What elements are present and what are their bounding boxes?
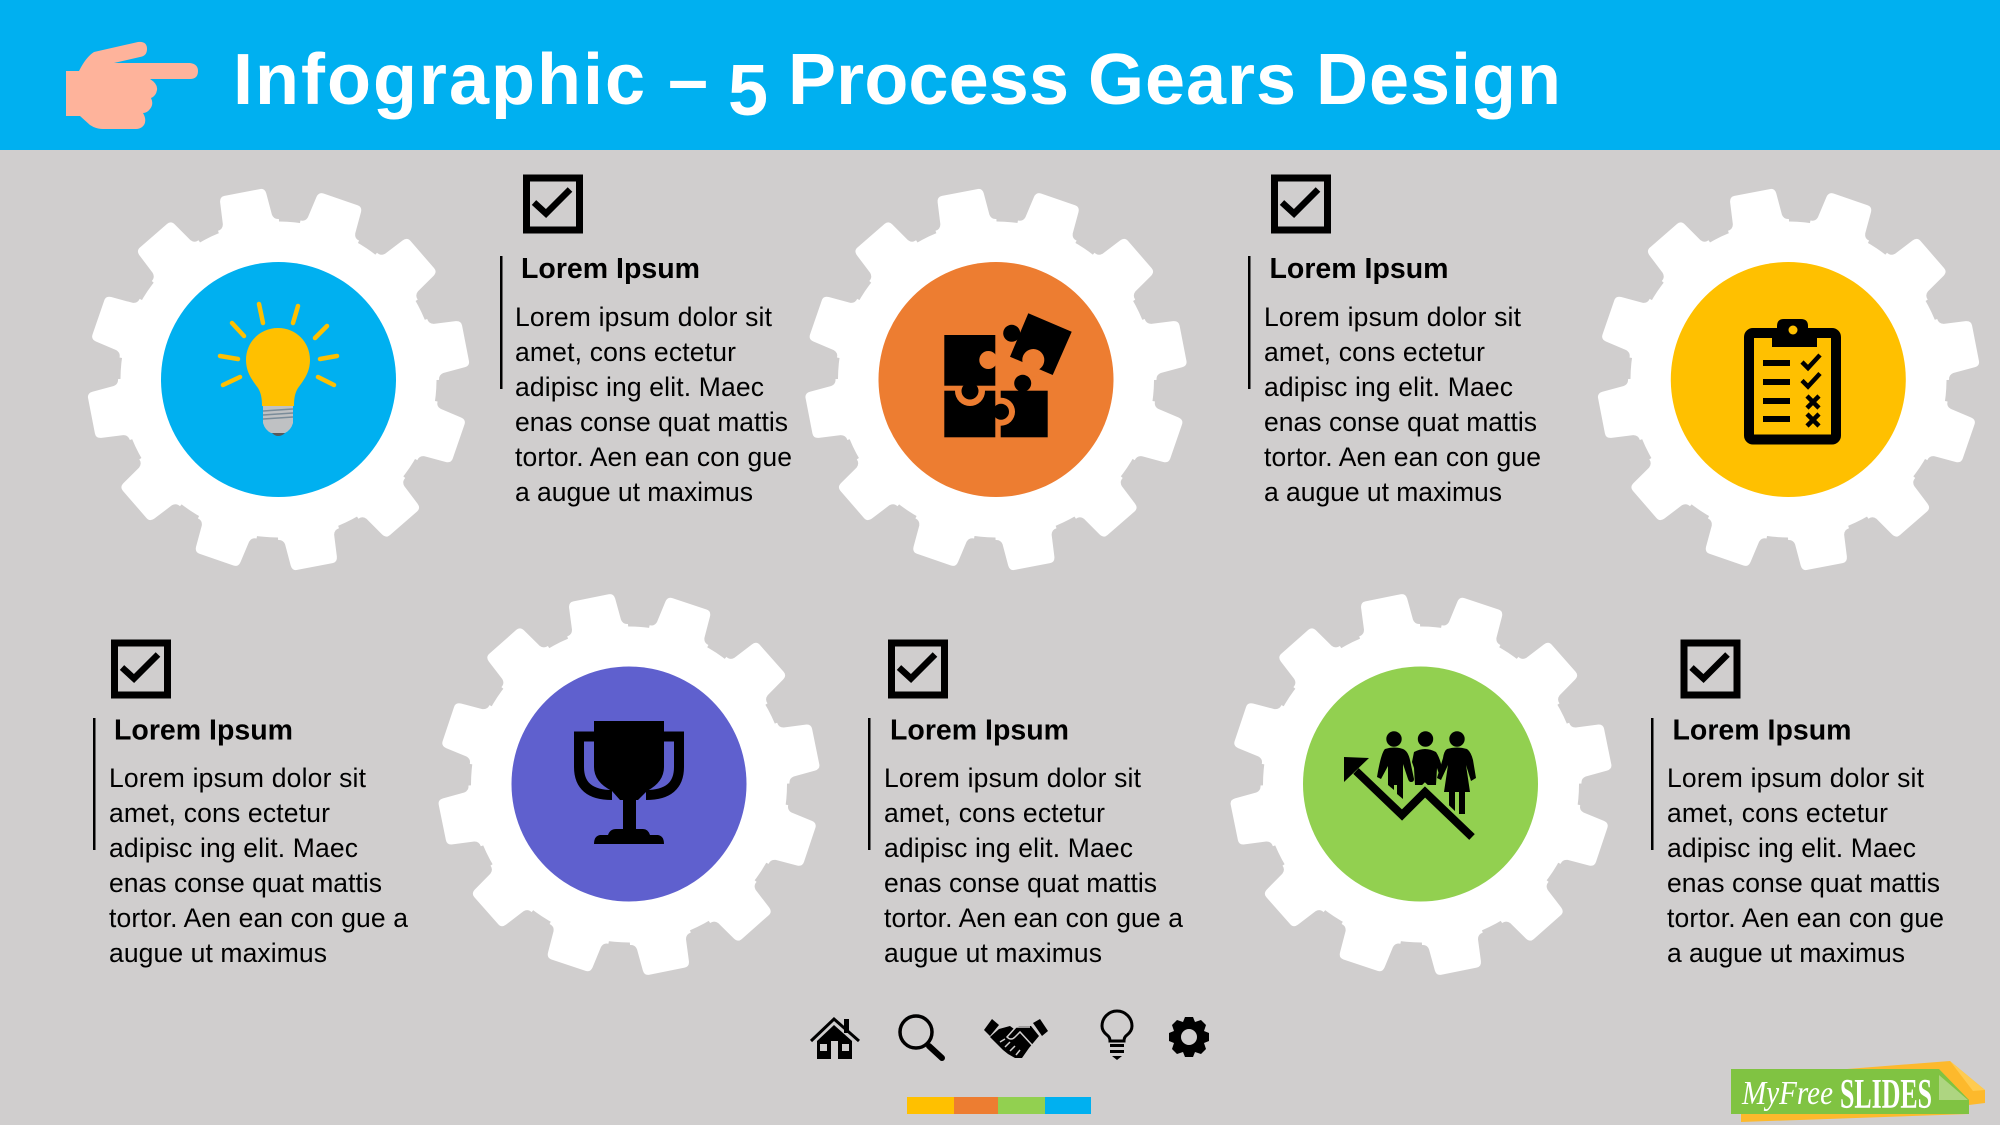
text block 2 [1248,178,1541,507]
gear 4: purple trophy [404,560,854,1009]
text block 4: Lorem ipsum dolor sit [884,763,1142,793]
icon: outline lightbulb [1102,1011,1132,1060]
gear 1: blue lightbulb [55,156,502,603]
icon: magnifier [900,1016,942,1058]
text block 1: amet, cons ectetur [515,337,736,367]
text block 5: adipisc ing elit. Maec [1667,833,1916,863]
text block 1: enas conse quat mattis [515,407,788,437]
text block 2: a augue ut maximus [1264,477,1502,507]
text block 1: tortor. Aen ean con gue [515,442,792,472]
text block 1: Lorem ipsum dolor sit [515,302,773,332]
logo: MyFree Slides [1731,1061,1985,1122]
text block 2: enas conse quat mattis [1264,407,1537,437]
text block 1: a augue ut maximus [515,477,753,507]
bottom icon row [811,1011,1209,1060]
text block 5: Lorem Ipsum [1672,714,1852,746]
text block 3: adipisc ing elit. Maec [109,833,358,863]
text block 1 [500,178,792,507]
text block 4: Lorem Ipsum [890,714,1069,746]
gear 5: green people chart [1196,560,1646,1009]
checkbox icon [1684,643,1737,695]
icon: puzzle pieces [944,313,1072,437]
logo: MyFree Slides: MyFree [1741,1075,1833,1112]
icon: clipboard checklist [1749,319,1836,440]
text block 4: adipisc ing elit. Maec [884,833,1133,863]
icon: handshake [984,1019,1048,1058]
text block 5 [1651,643,1944,968]
text block 4 [868,643,1183,968]
text block 4: augue ut maximus [884,938,1102,968]
text block 2: amet, cons ectetur [1264,337,1485,367]
text block 5: amet, cons ectetur [1667,798,1888,828]
text block 3: tortor. Aen ean con gue a [109,903,408,933]
text block 3: augue ut maximus [109,938,327,968]
text block 2: Lorem Ipsum [1270,253,1448,285]
text block 2: Lorem ipsum dolor sit [1264,302,1522,332]
icon: house [811,1019,859,1059]
text block 3: Lorem ipsum dolor sit [109,763,367,793]
icon: pointing hand [66,42,198,129]
title: Design [1316,40,1561,120]
text block 5: tortor. Aen ean con gue [1667,903,1944,933]
text block 5: Lorem ipsum dolor sit [1667,763,1925,793]
icon: settings gear [1169,1017,1209,1057]
icon: trophy [579,721,679,844]
colour bar [907,1097,1091,1114]
text block 5: a augue ut maximus [1667,938,1905,968]
title: – [668,40,708,120]
title: Infographic [233,40,645,120]
text block 3: amet, cons ectetur [109,798,330,828]
title: 5 [728,51,768,131]
logo: MyFree Slides: SLIDES [1840,1072,1932,1118]
text block 5: enas conse quat mattis [1667,868,1940,898]
text block 4: tortor. Aen ean con gue a [884,903,1183,933]
text block 3: enas conse quat mattis [109,868,382,898]
text block 1: adipisc ing elit. Maec [515,372,764,402]
checkbox icon [892,643,944,695]
checkbox icon [1274,178,1328,230]
text block 3 [93,643,408,968]
checkbox icon [114,643,168,695]
text block 4: amet, cons ectetur [884,798,1105,828]
text block 4: enas conse quat mattis [884,868,1157,898]
checkbox icon [526,178,580,230]
text block 2: tortor. Aen ean con gue [1264,442,1541,472]
gear 3: yellow clipboard [1565,156,2000,603]
text block 2: adipisc ing elit. Maec [1264,372,1513,402]
text block 1: Lorem Ipsum [521,253,700,285]
title: Process [788,40,1069,120]
text block 3: Lorem Ipsum [114,714,293,746]
header band [0,0,2000,150]
gear 2: orange puzzle [773,156,1219,603]
title: Gears [1088,40,1296,120]
icon: people with rising arrow [1344,731,1476,837]
icon: lightbulb [220,304,337,436]
